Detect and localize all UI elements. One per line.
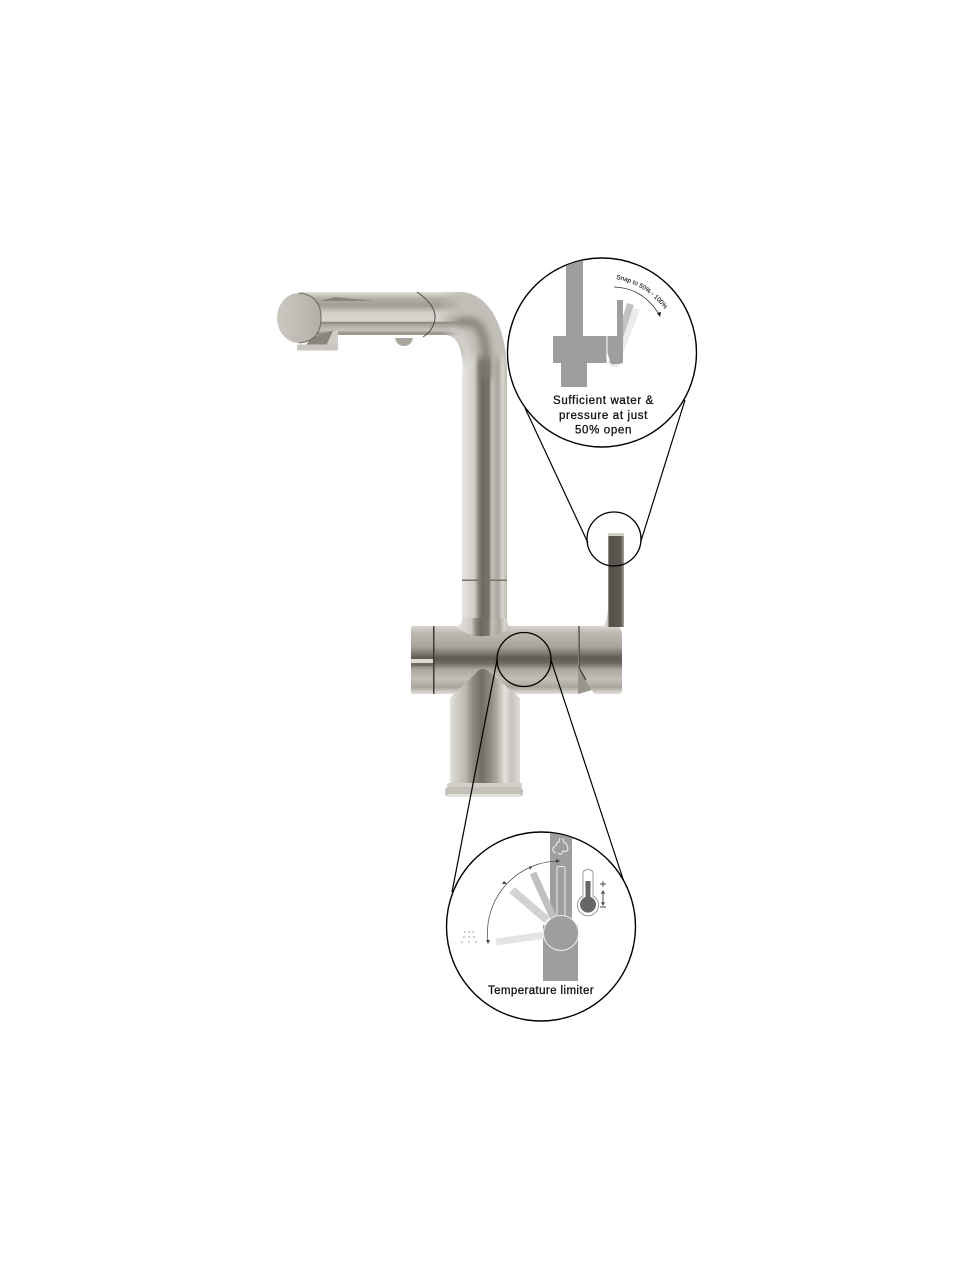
faucet spout	[277, 280, 515, 585]
magnifier circle on mixer	[497, 632, 551, 686]
diagram: faucet side view	[553, 255, 640, 387]
caption: Sufficient water &	[553, 395, 654, 407]
magnifier circle on lever	[587, 512, 641, 566]
spout end cap	[277, 293, 321, 343]
faucet infographic	[277, 257, 698, 1022]
callout: sufficient water	[506, 257, 698, 448]
caption	[553, 395, 654, 436]
caption: pressure at just	[559, 410, 648, 422]
faucet lower stem	[445, 669, 523, 797]
arc arrow	[487, 861, 560, 942]
spout button	[395, 338, 413, 346]
callout: temperature limiter	[446, 825, 636, 1021]
spout tip aerator	[305, 329, 338, 347]
diagram: handle positions	[496, 825, 578, 981]
faucet mixer body	[411, 618, 622, 694]
faucet lever handle	[603, 533, 624, 627]
faucet column	[456, 580, 510, 636]
snap label: Snap to 50% - 100%	[616, 274, 668, 309]
snap arrow	[614, 287, 660, 316]
icon: steam	[553, 838, 568, 854]
icon: plus minus scale	[600, 881, 606, 907]
icon: droplets	[461, 931, 477, 943]
caption: Temperature limiter	[488, 985, 594, 997]
icon: thermometer	[578, 870, 598, 916]
faucet photo	[277, 280, 624, 797]
callout lines	[452, 400, 685, 892]
caption: 50% open	[575, 424, 632, 436]
